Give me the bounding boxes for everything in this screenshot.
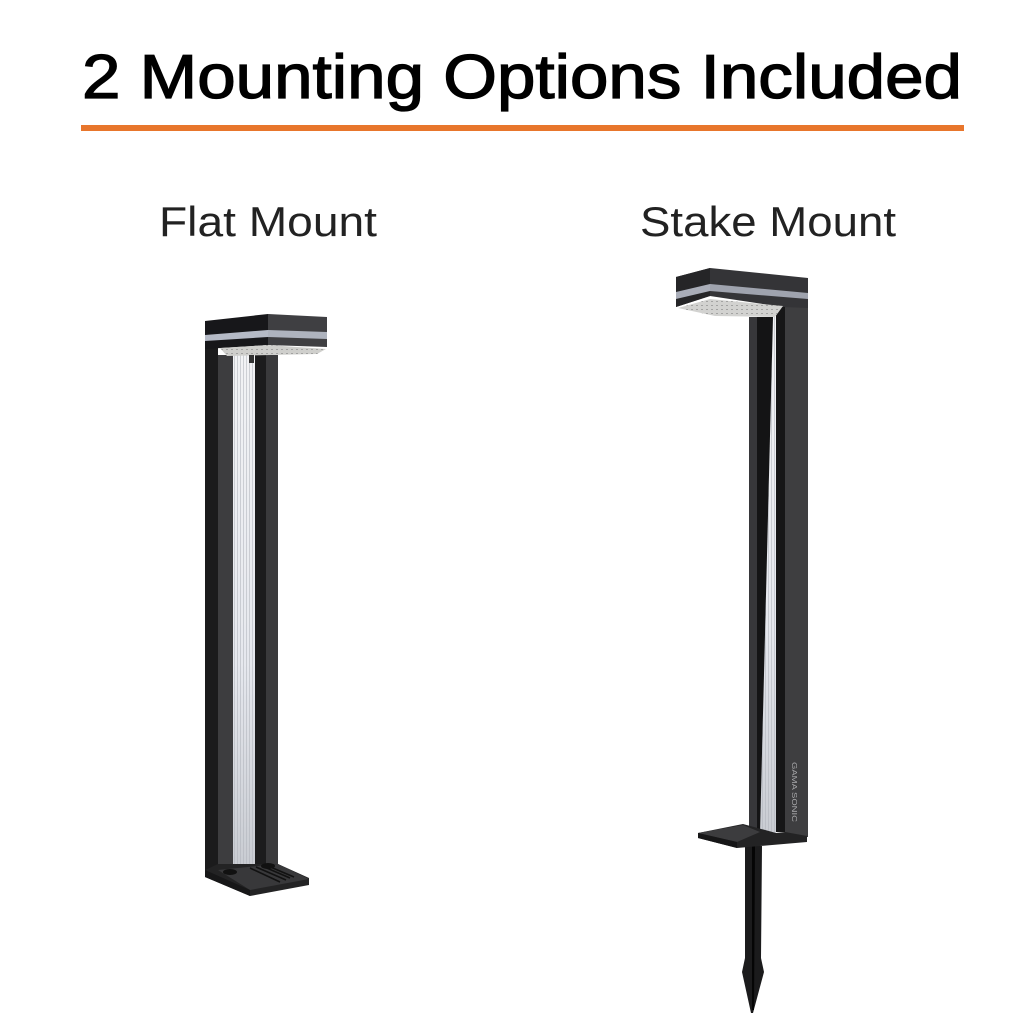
label: Flat Mount: Flat Mount xyxy=(159,198,377,245)
column frame xyxy=(749,305,808,837)
solar cap xyxy=(205,314,327,349)
title: 2 Mounting Options Included xyxy=(82,43,962,112)
lens xyxy=(220,345,326,356)
base plate xyxy=(205,863,309,896)
stake xyxy=(742,846,764,1013)
solar cap xyxy=(676,268,808,308)
base plate xyxy=(698,824,807,848)
label: Stake Mount: Stake Mount xyxy=(640,198,896,245)
bracket peg xyxy=(249,355,254,363)
light: flat mount xyxy=(205,314,327,896)
brand text: GAMA SONIC xyxy=(790,762,799,823)
lens xyxy=(678,299,783,317)
light: stake mount xyxy=(676,268,808,1013)
orange title underline xyxy=(81,125,964,131)
column frame xyxy=(205,345,278,877)
